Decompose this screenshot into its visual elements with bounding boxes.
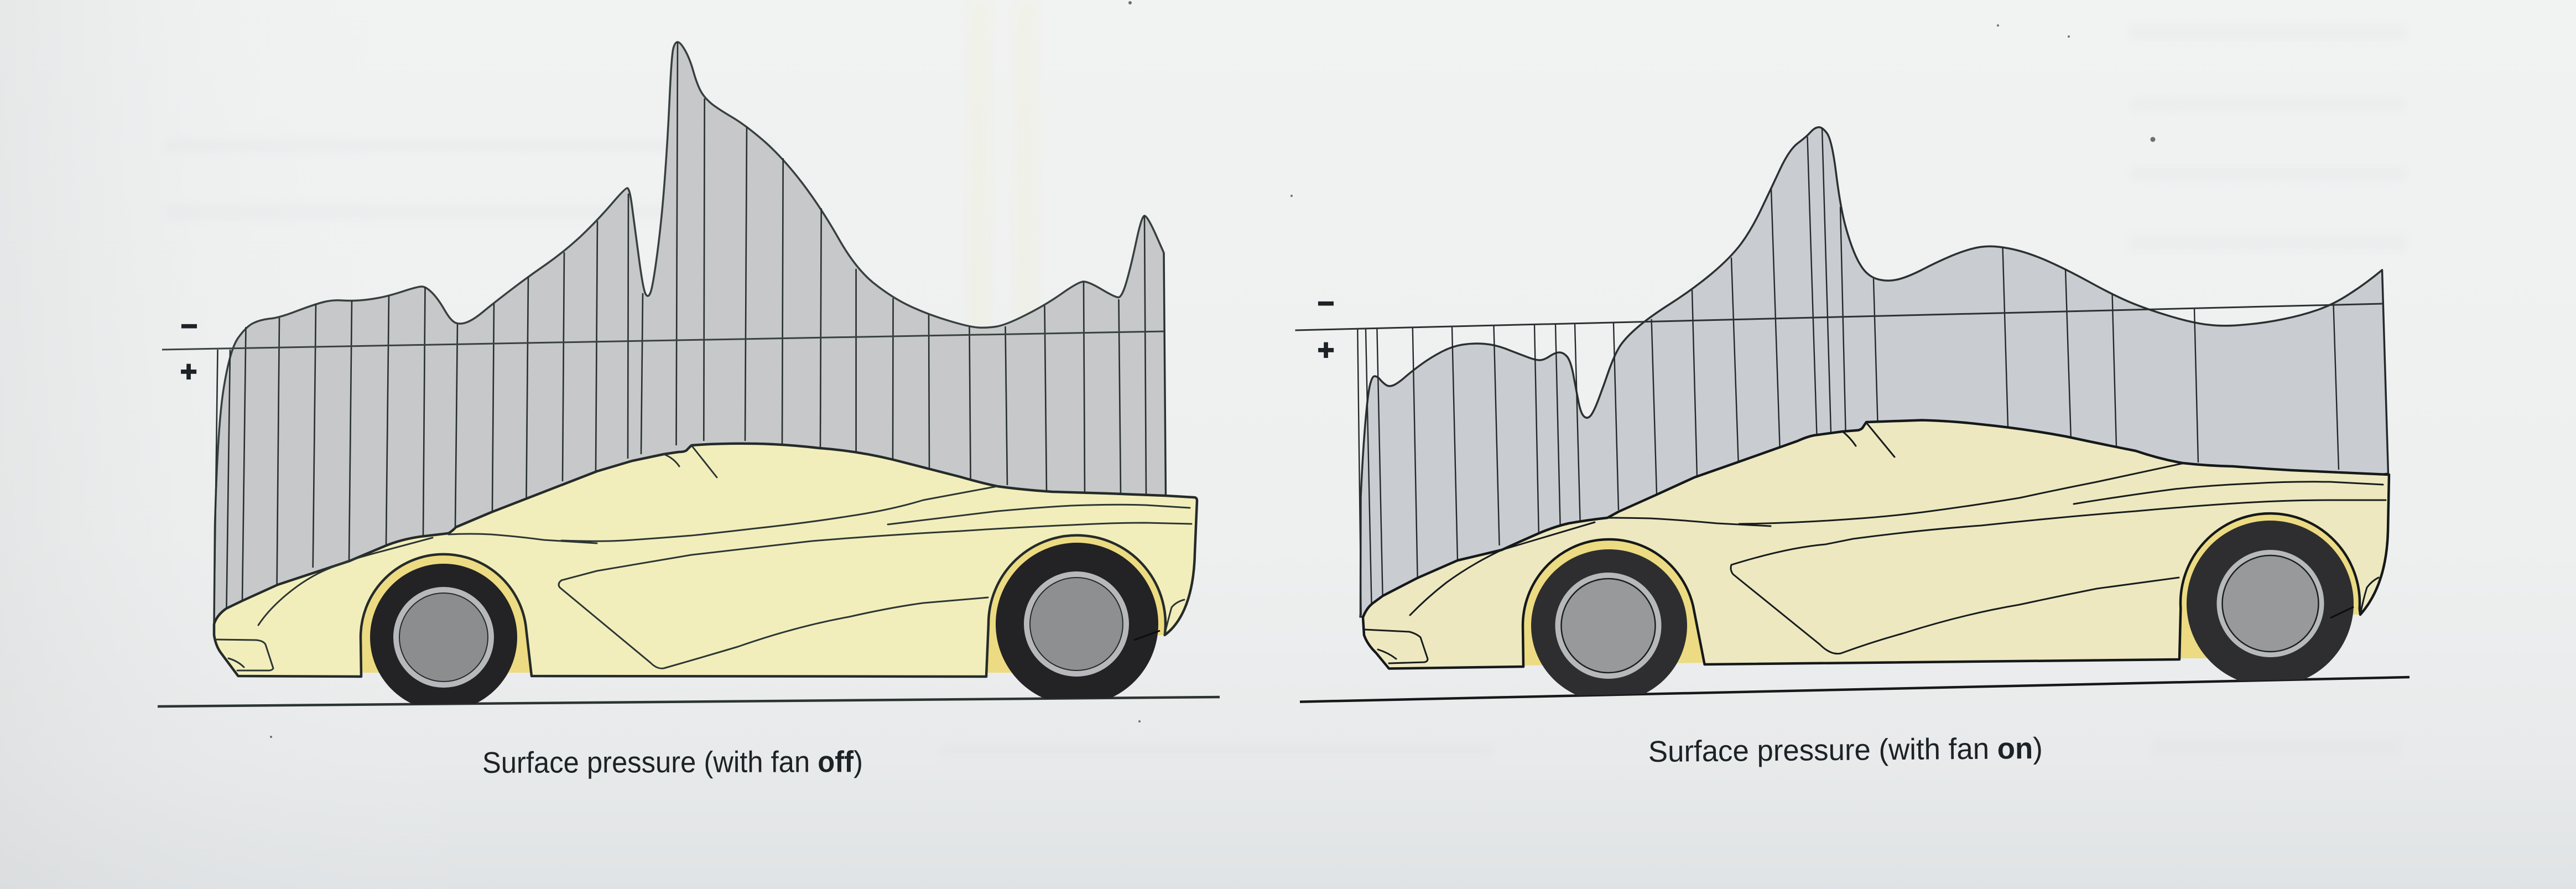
caption fan off: Surface pressure (with fan off)	[482, 745, 863, 779]
body lines	[216, 445, 1191, 670]
car body	[1363, 420, 2389, 668]
rear wheel	[996, 543, 1160, 705]
wheel arches	[361, 536, 1165, 673]
rear wheel	[2187, 521, 2354, 687]
front wheel	[370, 564, 517, 711]
pressure area fan off	[214, 42, 1166, 625]
pressure measurement lines fan off	[214, 42, 1166, 623]
ground line fan on	[1300, 677, 2410, 702]
plus sign fan on: +	[1318, 334, 1334, 366]
car body	[214, 444, 1197, 677]
plus sign fan off: +	[180, 356, 197, 388]
front wheel	[1531, 549, 1687, 702]
chart: surface pressure with fan on	[1295, 127, 2410, 768]
ground line fan off	[158, 697, 1220, 706]
zero pressure baseline fan on	[1295, 304, 2382, 330]
chart: surface pressure with fan off	[158, 42, 1220, 779]
minus sign fan off: −	[181, 310, 197, 342]
zero pressure baseline fan off	[162, 331, 1164, 350]
car fan on	[1363, 420, 2389, 702]
car fan off	[214, 444, 1197, 711]
caption fan on: Surface pressure (with fan on)	[1648, 732, 2043, 768]
wheel arches	[1523, 513, 2360, 666]
pressure area fan on	[1360, 127, 2388, 617]
pressure measurement lines fan on	[1357, 128, 2388, 615]
minus sign fan on: −	[1318, 288, 1334, 320]
body lines	[1365, 423, 2386, 663]
